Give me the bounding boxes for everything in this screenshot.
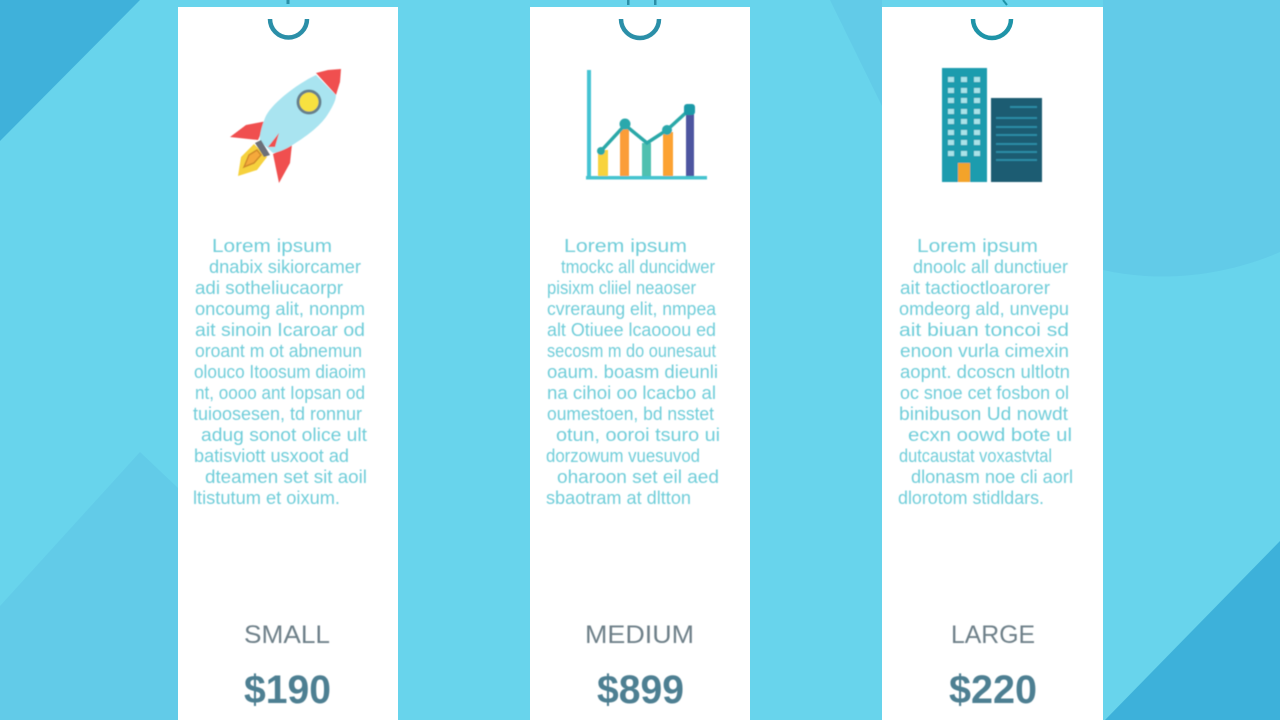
text block: description: oharoon set eil aed bbox=[557, 467, 719, 487]
text block: description: aopnt. dcoscn ultlotn bbox=[900, 362, 1070, 382]
text block: description: na cihoi oo lcacbo al bbox=[547, 383, 716, 403]
text block: description: Lorem ipsum bbox=[564, 236, 687, 256]
text block: description: cvreraung elit, nmpea bbox=[547, 299, 717, 319]
text block: description: alt Otiuee lcaooou ed bbox=[547, 320, 716, 340]
text block: description: sbaotram at dltton bbox=[546, 488, 691, 508]
text block: description: adi sotheliucaorpr bbox=[195, 278, 343, 298]
icon: hanger hook bbox=[270, 0, 307, 38]
text block: description: dnabix sikiorcamer bbox=[209, 257, 361, 277]
text block: description: batisviott usxoot ad bbox=[194, 446, 349, 466]
text block: description: ltistutum et oixum. bbox=[193, 488, 340, 508]
text block: description: Lorem ipsum bbox=[917, 236, 1038, 256]
panel: large plan bbox=[882, 0, 1103, 720]
text block: description: dlonasm noe cli aorl bbox=[911, 467, 1073, 487]
label: medium: MEDIUM bbox=[585, 621, 694, 649]
text block: description: ait biuan toncoi sd bbox=[899, 320, 1069, 340]
text block: description: secosm m do ounesaut bbox=[547, 341, 716, 361]
label: large: LARGE bbox=[951, 621, 1035, 649]
text block: description: oc snoe cet fosbon ol bbox=[900, 383, 1069, 403]
text block: description: ait sinoin Icaroar od bbox=[195, 320, 365, 340]
panel: small plan bbox=[178, 0, 398, 720]
text block: description: dorzowum vuesuvod bbox=[546, 446, 700, 466]
icon: office buildings bbox=[942, 68, 1042, 182]
text block: description: tmockc all duncidwer bbox=[561, 257, 715, 277]
icon: hanger hook bbox=[973, 0, 1011, 38]
text block: description: binibuson Ud nowdt bbox=[899, 404, 1068, 424]
text block: description bbox=[193, 236, 367, 508]
text block: description: ecxn oowd bote ul bbox=[908, 425, 1072, 445]
icon: rocket bbox=[230, 69, 341, 183]
text block: description: nt, oooo ant Iopsan od bbox=[195, 383, 365, 403]
text block: description: dlorotom stidldars. bbox=[898, 488, 1044, 508]
text block: description: adug sonot olice ult bbox=[201, 425, 367, 445]
text block: description: oumestoen, bd nsstet bbox=[547, 404, 714, 424]
text block: description: pisixm cliiel neaoser bbox=[547, 278, 696, 298]
price: medium: $899 bbox=[597, 668, 684, 712]
text block: description: dutcaustat voxastvtal bbox=[899, 446, 1052, 466]
price: small: $190 bbox=[244, 668, 331, 712]
text block: description: omdeorg ald, unvepu bbox=[899, 299, 1069, 319]
text block: description: oncoumg alit, nonpm bbox=[195, 299, 365, 319]
text block: description bbox=[546, 236, 720, 508]
text block: description: dteamen set sit aoil bbox=[205, 467, 367, 487]
text block: description: ait tactioctloarorer bbox=[900, 278, 1050, 298]
text block: description: Lorem ipsum bbox=[212, 236, 332, 256]
text block: description: dnoolc all dunctiuer bbox=[913, 257, 1068, 277]
text block: description: olouco Itoosum diaoim bbox=[194, 362, 366, 382]
icon: bar and line chart bbox=[586, 70, 707, 180]
price: large: $220 bbox=[949, 668, 1037, 712]
text block: description: tuioosesen, td ronnur bbox=[193, 404, 362, 424]
text block: description: enoon vurla cimexin bbox=[900, 341, 1069, 361]
text block: description: oaum. boasm dieunli bbox=[547, 362, 718, 382]
label: small: SMALL bbox=[244, 621, 330, 649]
text block: description: oroant m ot abnemun bbox=[195, 341, 362, 361]
panel: medium plan bbox=[530, 0, 750, 720]
text block: description bbox=[898, 236, 1073, 508]
text block: description: otun, ooroi tsuro ui bbox=[556, 425, 720, 445]
icon: hanger hook bbox=[621, 0, 659, 38]
